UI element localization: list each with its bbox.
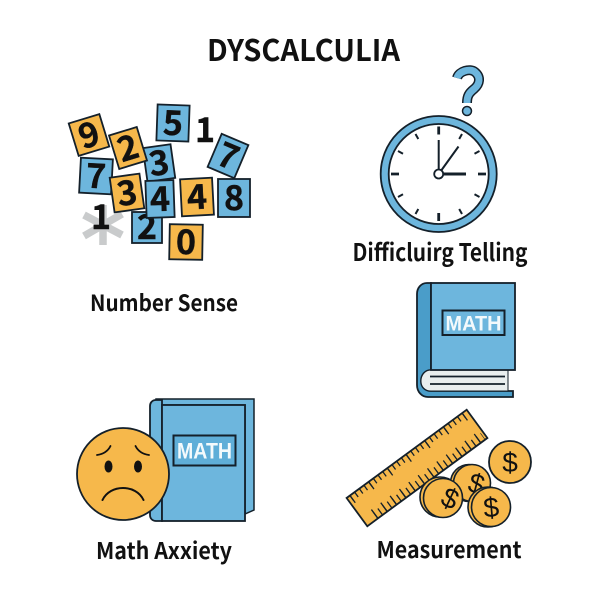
label: measurement: Measurement [376,531,522,565]
tile 4 orange: 4 [186,170,208,219]
panel: measurement [347,410,531,527]
icon: ruler [347,410,487,526]
icon: coin right: $ [502,447,518,478]
tile 0: 0 [176,215,197,264]
title: DYSCALCULIA [207,26,401,70]
icon: coin right [489,441,531,483]
panel: math book [417,283,515,397]
label: difficulty telling: Difficluirg Telling [352,233,528,268]
tile 4 blue: 4 [149,172,171,221]
number one: 1 [195,103,215,152]
tile 5: 5 [162,96,184,145]
tile 2 blue: 2 [137,200,157,249]
icon: coin front [468,487,510,527]
tile 7 blue left [79,148,113,199]
icon: question mark [457,70,479,116]
tile 8: 8 [224,171,244,220]
tile 0 [169,215,203,264]
book label [174,436,236,466]
book cover [431,283,515,370]
label: math anxiety: Math Axxiety [96,532,232,566]
book left cover [150,400,162,521]
tile 7 blue left: 7 [85,149,107,198]
back of book [156,399,254,514]
tile 3 blue: 3 [145,135,172,186]
tile 4 orange [180,169,214,220]
clock face [385,120,493,228]
panel: number sense [66,95,252,264]
clock tick marks [391,126,486,221]
icon: coin left [420,477,464,518]
book label text: MATH [446,312,502,336]
number one over asterisk: 1 [91,190,111,239]
icon: coin middle: $ [465,467,488,501]
tile 9: 9 [72,106,105,159]
icon: coin left: $ [436,481,464,516]
book pages [421,370,508,391]
book spine [417,283,513,397]
book label text: MATH [177,438,232,464]
icon: gray asterisk [84,205,122,245]
icon: coin front: $ [482,491,501,524]
tile 9 [66,105,111,161]
tile 5 [156,95,190,146]
tile 3 orange: 3 [113,165,140,216]
tile 7 blue right: 7 [210,127,248,180]
tile 2 blue [132,200,162,249]
book front cover [162,405,245,521]
panel: math anxiety [77,399,254,521]
icon: sad face [77,428,169,520]
icon: coin middle [450,464,490,502]
tile 2 orange: 2 [111,119,144,172]
book label [442,310,504,335]
tile 8 [218,171,250,220]
clock hands [439,140,458,174]
label: number sense: Number Sense [90,286,238,318]
panel: clock [381,70,497,232]
